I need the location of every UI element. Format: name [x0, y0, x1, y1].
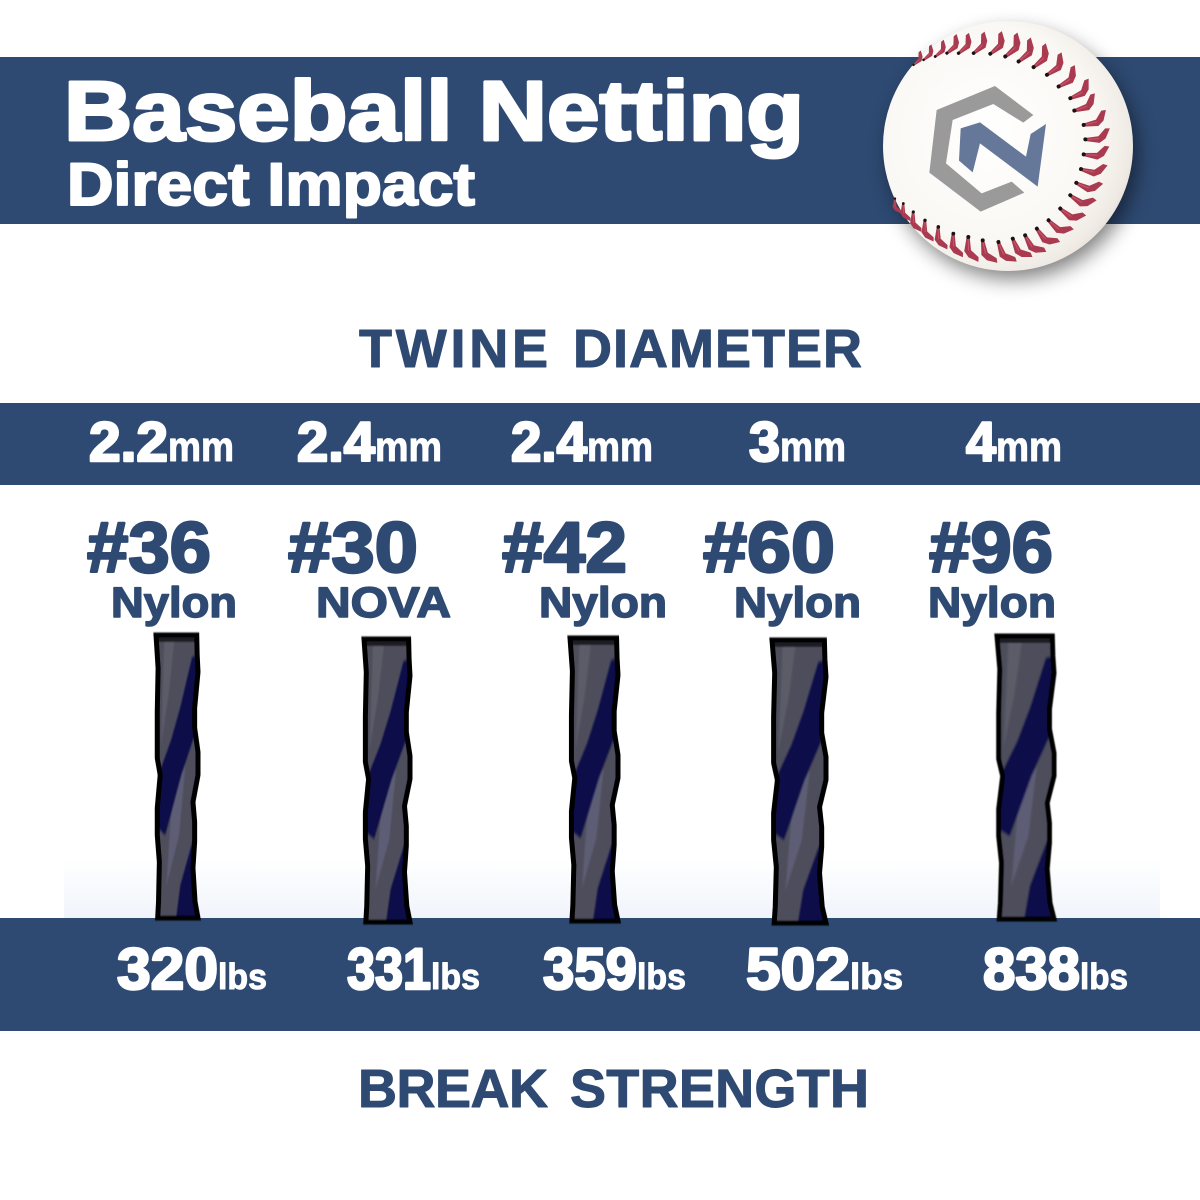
heading: break strength: STRENGTH: [570, 1059, 869, 1119]
label: #60 Nylon: #60: [703, 509, 835, 588]
strength band: [0, 635, 1200, 1031]
label: #36 Nylon: #36: [87, 509, 211, 588]
label: 4mm: 4: [966, 410, 996, 473]
subtitle: Direct Impact: [67, 151, 475, 218]
label: 3mm: mm: [780, 423, 846, 470]
fade background behind twines: [64, 860, 1160, 918]
label: 3mm: [749, 410, 846, 473]
logo: blue N: [959, 122, 1046, 187]
label: #30 NOVA: #30: [288, 509, 418, 588]
header band: [0, 57, 1200, 224]
baseball stitches: [892, 31, 1110, 266]
label: #42 Nylon: #42: [502, 509, 627, 588]
label: #30 NOVA: NOVA: [316, 579, 451, 627]
label: #60 Nylon: Nylon: [734, 579, 861, 627]
label: #60 Nylon: [703, 509, 861, 627]
label: #42 Nylon: [502, 509, 667, 627]
twine: #60: [772, 640, 827, 923]
heading: break strength: [358, 1059, 869, 1119]
label: 320lbs: lbs: [218, 956, 267, 997]
label: 2.4mm second: [511, 410, 653, 473]
label: 3mm: 3: [749, 410, 780, 473]
label: #96 Nylon: Nylon: [928, 579, 1056, 627]
label: #36 Nylon: Nylon: [111, 579, 237, 627]
label: 2.2mm: mm: [168, 423, 234, 470]
label: 2.4mm second: mm: [587, 423, 653, 470]
label: 2.2mm: [89, 410, 234, 473]
label: 359lbs: 359: [543, 937, 637, 1002]
heading: break strength: BREAK: [358, 1059, 548, 1119]
label: #36 Nylon: [87, 509, 237, 627]
title: Baseball Netting: [64, 64, 804, 158]
twine: #42: [570, 638, 619, 921]
label: 359lbs: [543, 937, 686, 1002]
label: 2.4mm second: 2.4: [511, 410, 587, 473]
label: 838lbs: lbs: [1080, 956, 1128, 997]
twine: #30: [364, 639, 411, 922]
heading: twine diameter: TWINE: [359, 319, 548, 379]
twine: #96: [997, 636, 1055, 919]
label: 359lbs: lbs: [637, 956, 686, 997]
label: #96 Nylon: [928, 509, 1056, 627]
label: 4mm: [966, 410, 1062, 473]
heading: twine diameter: [359, 319, 862, 379]
label: #42 Nylon: Nylon: [539, 579, 667, 627]
label: 320lbs: 320: [117, 937, 218, 1002]
label: #96 Nylon: #96: [929, 509, 1053, 588]
label: 502lbs: [746, 937, 903, 1002]
label: 2.4mm: 2.4: [297, 410, 375, 473]
label: 838lbs: 838: [983, 937, 1080, 1002]
heading: twine diameter: DIAMETER: [573, 319, 862, 379]
label: 4mm: mm: [996, 423, 1062, 470]
label: 331lbs: lbs: [431, 956, 480, 997]
label: 2.2mm: 2.2: [89, 410, 168, 473]
label: 502lbs: lbs: [850, 956, 903, 997]
logo: gray C: [929, 86, 1033, 212]
label: 838lbs: [983, 937, 1128, 1002]
label: 331lbs: 331: [347, 937, 431, 1002]
icon: baseball with logo: [883, 21, 1137, 279]
label: 502lbs: 502: [746, 937, 850, 1002]
label: 2.4mm: [297, 410, 442, 473]
label: #30 NOVA: [288, 509, 451, 627]
label: 2.4mm: mm: [375, 423, 442, 470]
twine: #36: [156, 635, 199, 918]
label: 320lbs: [117, 937, 267, 1002]
diameter band: [0, 403, 1200, 485]
